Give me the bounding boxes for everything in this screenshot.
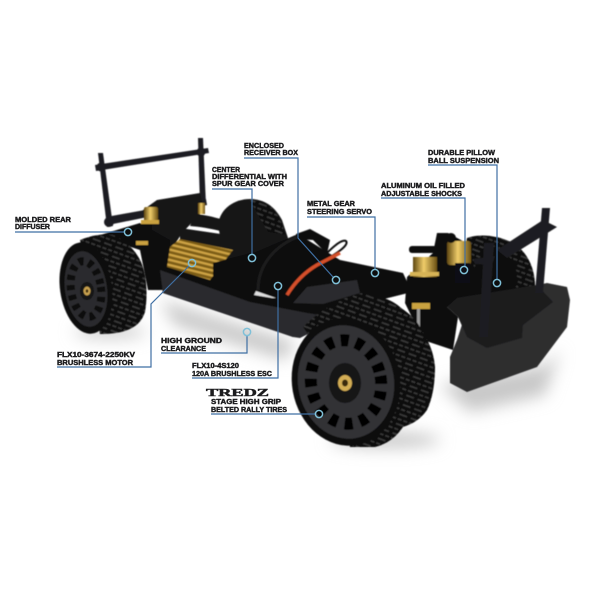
callout: tredz rally tires: TREDZ <box>206 387 269 399</box>
callout: center differential: SPUR GEAR COVER <box>212 179 285 188</box>
electronics and wires <box>254 229 360 304</box>
callout: high ground clearance <box>161 328 251 353</box>
callout: brushless motor: FLX10-3674-2250KV <box>57 350 135 359</box>
callout: enclosed receiver box: RECEIVER BOX <box>244 148 298 157</box>
rear suspension brace and arm <box>143 193 290 255</box>
callout: tredz rally tires <box>206 387 323 418</box>
foam bumper <box>447 283 570 392</box>
callout: pillow ball suspension: DURABLE PILLOW <box>428 148 495 157</box>
front far wheel <box>460 236 535 306</box>
callout: high ground clearance: CLEARANCE <box>161 344 206 353</box>
rear body mount <box>95 138 209 227</box>
callout: brushless esc: FLX10-4S120 <box>192 361 239 370</box>
ground shadows <box>74 300 560 448</box>
callout: enclosed receiver box: ENCLOSED <box>244 141 285 150</box>
rear tyre <box>80 235 147 334</box>
callout: molded rear diffuser: DIFFUSER <box>15 222 51 231</box>
callout: steering servo: STEERING SERVO <box>307 207 372 216</box>
callout: aluminum shocks <box>381 181 468 274</box>
callout: pillow ball suspension: BALL SUSPENSION <box>428 156 499 165</box>
callout: tredz rally tires: STAGE HIGH GRIP <box>211 397 281 406</box>
callout: brushless motor: BRUSHLESS MOTOR <box>57 358 134 367</box>
rear right wheel <box>218 199 288 262</box>
callout: steering servo: METAL GEAR <box>307 199 356 208</box>
rear gearbox <box>97 223 170 290</box>
gold brushless motor <box>167 239 253 291</box>
rear shock <box>136 203 205 245</box>
front shock right <box>446 233 471 283</box>
callout: molded rear diffuser: MOLDED REAR <box>15 215 72 224</box>
callout: center differential <box>212 165 287 262</box>
callout: aluminum shocks: ALUMINUM OIL FILLED <box>381 181 466 190</box>
callout: tredz rally tires: BELTED RALLY TIRES <box>211 405 287 414</box>
callout: brushless esc <box>192 282 282 378</box>
callout: enclosed receiver box <box>244 141 340 284</box>
front wheel face <box>282 310 410 454</box>
front tyre <box>303 293 435 447</box>
callout: pillow ball suspension <box>428 148 501 287</box>
callout: center differential: CENTER <box>212 165 241 174</box>
front shock left <box>409 246 439 329</box>
callout: brushless motor <box>57 259 196 367</box>
callout: steering servo <box>307 199 379 277</box>
callout: brushless esc: 120A BRUSHLESS ESC <box>192 369 273 378</box>
callout: aluminum shocks: ADJUSTABLE SHOCKS <box>381 189 462 198</box>
front body mount <box>473 208 557 337</box>
callout: high ground clearance: HIGH GROUND <box>161 336 223 345</box>
front suspension <box>405 233 478 350</box>
rear wheel face <box>54 239 118 337</box>
callout: molded rear diffuser <box>15 215 132 236</box>
car chassis illustration <box>54 138 570 454</box>
chassis tub <box>158 234 412 338</box>
callout: center differential: DIFFERENTIAL WITH <box>212 172 287 181</box>
